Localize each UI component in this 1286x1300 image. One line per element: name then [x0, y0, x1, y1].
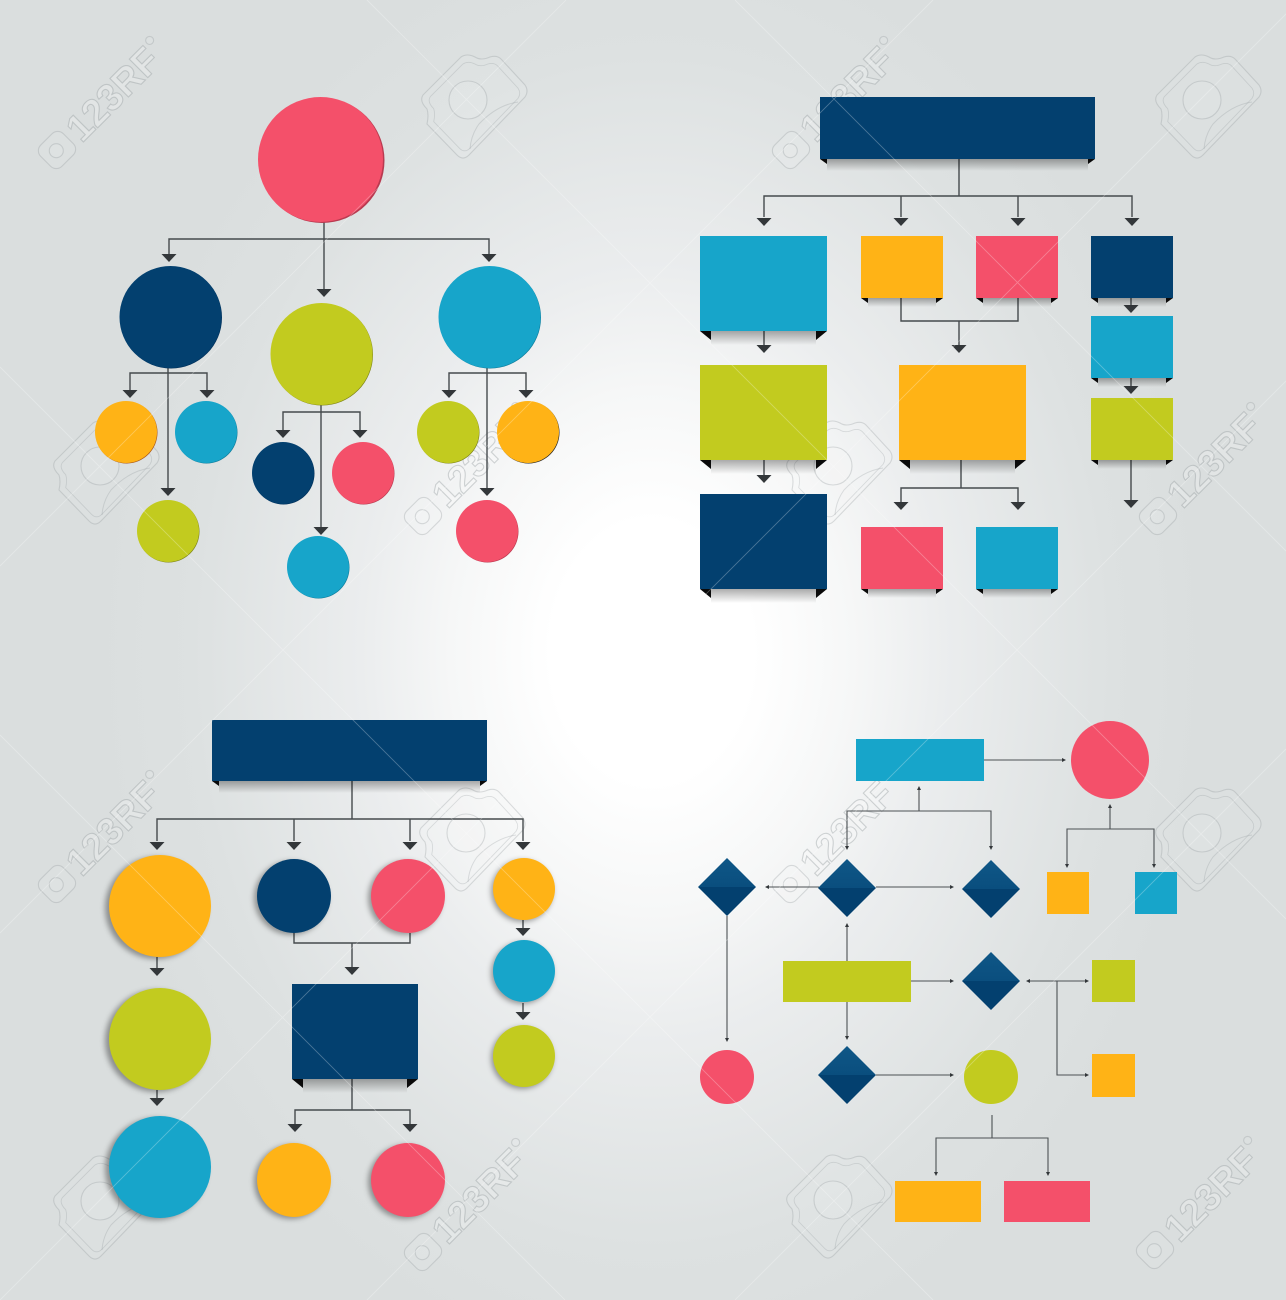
watermark: 123RF wordmarks: 123RF [792, 774, 903, 884]
box: red bottom [861, 527, 943, 598]
circle: red bottom [371, 1143, 445, 1217]
circle: blue small [493, 940, 555, 1002]
circle: red top [1071, 721, 1149, 799]
connector lines [727, 760, 1154, 1173]
arrowheads [756, 218, 1140, 510]
soft circle shadows [105, 857, 553, 1220]
watermark: 123RF wordmarks: 123RF [424, 406, 535, 516]
circle: lime small [493, 1025, 555, 1087]
box: orange [861, 236, 943, 307]
box: navy center [292, 984, 418, 1093]
watermark: 123RF wordmarks: 123RF [792, 40, 903, 150]
square: lime [1092, 960, 1135, 1002]
watermark: 123RF wordmarks: 123RF [1159, 406, 1270, 516]
circle: orange large [109, 855, 211, 957]
header box with folds [212, 720, 487, 793]
arrowheads [725, 758, 1156, 1176]
box: lime [700, 365, 827, 474]
circle: orange bottom [257, 1143, 331, 1217]
connector lines [764, 159, 1132, 502]
box: red [976, 236, 1058, 307]
watermark: 123RF wordmarks: 123RF [58, 40, 169, 150]
connector lines [130, 222, 526, 529]
box: blue small [1091, 316, 1173, 387]
box: orange large [899, 365, 1026, 474]
decision diamonds [698, 858, 1020, 1104]
circle: root [258, 97, 384, 223]
arrowheads [150, 842, 530, 1132]
connector lines [157, 781, 523, 1124]
box: blue bottom [976, 527, 1058, 598]
box: navy small [1091, 236, 1173, 307]
panel: circle flowchart, top left [95, 97, 560, 598]
circle: red [371, 859, 445, 933]
square: orange [1047, 872, 1089, 914]
watermark: 123RF wordmarks: 123RF [1156, 1140, 1267, 1250]
circle: red terminal [700, 1050, 754, 1104]
circle: navy branch [120, 266, 222, 368]
square: orange lower [1092, 1054, 1135, 1097]
box: lime [783, 961, 911, 1002]
header box with shadow and folds [820, 97, 1095, 171]
circle: blue large [109, 1116, 211, 1218]
watermark: 123RF wordmarks: 123RF [58, 774, 169, 884]
watermark: 123RF wordmarks: 123RF [424, 1142, 535, 1252]
box: blue top [856, 739, 984, 781]
panel: decision flowchart, bottom right [698, 721, 1177, 1222]
square: blue [1135, 872, 1177, 914]
panel: rectangle flowchart, top right [700, 97, 1173, 603]
circle: lime large [109, 988, 211, 1090]
box: navy large [700, 494, 827, 603]
circle: navy [257, 859, 331, 933]
arrowheads [122, 254, 534, 535]
panel: mixed flowchart, bottom left [105, 720, 555, 1220]
circle: blue branch [438, 266, 541, 368]
circle: orange small [493, 858, 555, 920]
circle: lime terminal [964, 1050, 1018, 1104]
box: orange bottom [895, 1181, 981, 1222]
box: blue [700, 236, 827, 345]
circle: lime branch [270, 303, 373, 406]
box: red bottom [1004, 1181, 1090, 1222]
box: lime small [1091, 398, 1173, 469]
small circles [95, 401, 560, 598]
